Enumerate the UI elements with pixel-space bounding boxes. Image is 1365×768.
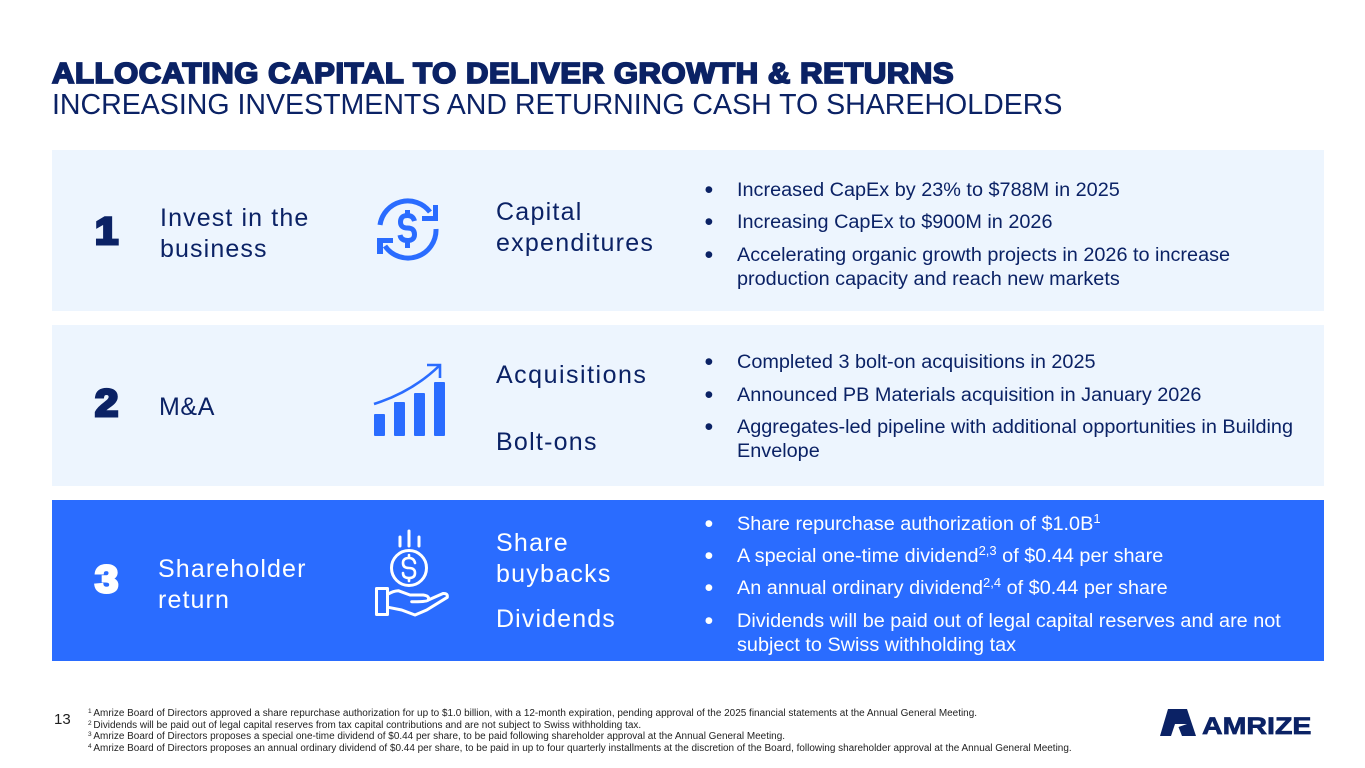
bullets: M&A: •: [704, 413, 713, 441]
number 2: 2: [95, 383, 118, 425]
heading: capital expenditures: Capital: [496, 198, 583, 226]
label: invest in the business: business: [160, 235, 268, 263]
label: M&A: M&A: [159, 393, 215, 421]
label: shareholder return: Shareholder: [158, 555, 307, 583]
heading: capital expenditures: [496, 198, 654, 257]
label: invest in the business: Invest in the: [160, 204, 309, 232]
heading: bolt-ons: Bolt-ons: [496, 428, 598, 456]
bullets: M&A: Envelope: [737, 440, 820, 462]
icon: dollar cycle: [377, 198, 438, 261]
bullets: shareholder return: A special one-time dividend2,3 of $0.44 per share: [737, 543, 1163, 567]
bullets: capex: •: [704, 241, 713, 269]
number 1: 1: [95, 211, 118, 253]
bullets: shareholder return: •: [704, 607, 713, 635]
footnotes: 4 Amrize Board of Directors proposes an annual ordinary dividend of $0.44 per share, to be paid in up to four quarterly installments at the discretion of the Board, following shareholder approval at the Annual General Meeting.: [88, 742, 1072, 754]
bullets: capex: •: [704, 208, 713, 236]
bullets: M&A: •: [704, 348, 713, 376]
page number: 13: [54, 711, 71, 728]
logo: Amrize: AMRIZE: [1202, 713, 1311, 740]
icon: hand with coin: [375, 530, 449, 616]
bullets: M&A: Aggregates-led pipeline with additional opportunities in Building: [737, 416, 1293, 438]
bullets: shareholder return: •: [704, 510, 713, 538]
panel: shareholder return: [52, 500, 1324, 661]
subtitle: INCREASING INVESTMENTS AND RETURNING CASH TO SHAREHOLDERS: [52, 89, 1062, 121]
bullets: capex: Increased CapEx by 23% to $788M in 2025: [737, 179, 1120, 201]
footnotes: 1 Amrize Board of Directors approved a share repurchase authorization for up to $1.0 billion, with a 12-month expiration, pending approval of the 2025 financial statements at the Annual General Meeting.: [88, 708, 977, 719]
bullets: capex: Accelerating organic growth projects in 2026 to increase: [737, 244, 1230, 266]
bullets: capex: production capacity and reach new markets: [737, 268, 1120, 290]
bullets: capex: Increasing CapEx to $900M in 2026: [737, 211, 1052, 233]
footnotes: [88, 708, 1072, 754]
bullets: M&A: •: [704, 381, 713, 409]
label: invest in the business: [160, 204, 309, 263]
bullets: shareholder return: An annual ordinary dividend2,4 of $0.44 per share: [737, 575, 1168, 599]
heading: share buybacks: Share: [496, 529, 569, 557]
bullets: M&A: [704, 348, 1293, 462]
heading: share buybacks: buybacks: [496, 560, 612, 588]
heading: acquisitions: Acquisitions: [496, 361, 647, 389]
panel: M&A: [52, 325, 1324, 486]
bullets: shareholder return: Dividends will be paid out of legal capital reserves and are not: [737, 610, 1281, 632]
label: shareholder return: return: [158, 586, 230, 614]
bullets: M&A: Completed 3 bolt-on acquisitions in 2025: [737, 351, 1096, 373]
bullets: capex: •: [704, 176, 713, 204]
footnotes: 3 Amrize Board of Directors proposes a special one-time dividend of $0.44 per share, to be paid following shareholder approval at the Annual General Meeting.: [88, 731, 785, 742]
bullets: shareholder return: subject to Swiss withholding tax: [737, 634, 1016, 656]
bullets: capex: [704, 176, 1230, 290]
heading: capital expenditures: expenditures: [496, 229, 654, 257]
footnotes: 2 Dividends will be paid out of legal capital reserves from tax capital contributions and are not subject to Swiss withholding tax.: [88, 720, 641, 730]
icon: rising bar chart: [374, 364, 445, 436]
number 3: 3: [95, 559, 118, 601]
title: ALLOCATING CAPITAL TO DELIVER GROWTH & RETURNS: [52, 58, 954, 90]
bullets: M&A: Announced PB Materials acquisition in January 2026: [737, 384, 1201, 406]
label: shareholder return: [158, 555, 307, 614]
bullets: shareholder return: Share repurchase authorization of $1.0B1: [737, 511, 1101, 535]
bullets: shareholder return: [704, 510, 1281, 656]
logo: Amrize: [1160, 709, 1311, 740]
heading: dividends: Dividends: [496, 605, 616, 633]
bullets: shareholder return: •: [704, 574, 713, 602]
bullets: shareholder return: •: [704, 542, 713, 570]
heading: share buybacks: [496, 529, 612, 588]
panel: invest in the business: [52, 150, 1324, 311]
